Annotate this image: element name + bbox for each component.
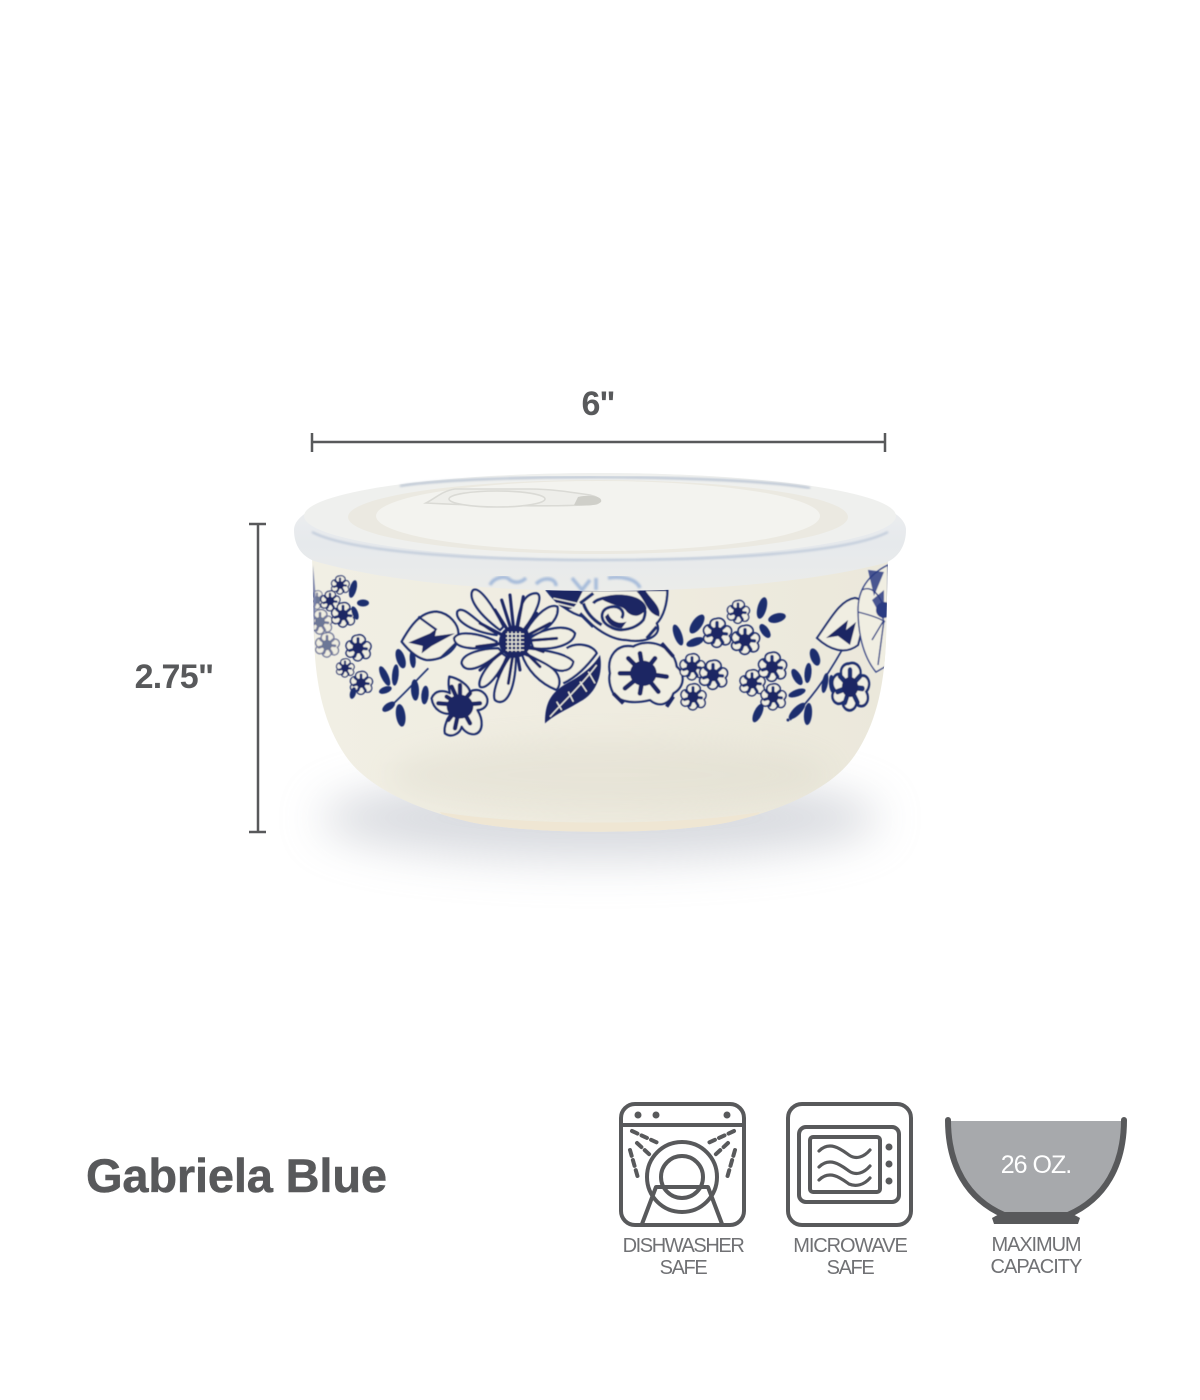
ghosted print through lid bbox=[490, 577, 640, 590]
lid front seal line bbox=[312, 532, 888, 560]
microwave label: MICROWAVE bbox=[793, 1235, 907, 1257]
large leaf under daisy bbox=[545, 645, 601, 723]
central flower bbox=[609, 643, 683, 707]
capacity label: CAPACITY bbox=[991, 1256, 1082, 1278]
vent tab bbox=[426, 489, 601, 507]
icon: microwave safe bbox=[788, 1104, 911, 1279]
large daisy bbox=[454, 590, 575, 702]
traced central bouquet bbox=[377, 590, 683, 735]
capacity label: MAXIMUM bbox=[992, 1234, 1081, 1256]
far right spray and flower bbox=[786, 565, 892, 725]
right flower cluster bbox=[670, 596, 787, 724]
bowl shadow bbox=[320, 776, 880, 860]
leaf spray bbox=[377, 648, 429, 727]
icon: maximum capacity bowl bbox=[948, 1120, 1124, 1278]
height dimension label: 2.75" bbox=[135, 658, 213, 696]
dishwasher label: SAFE bbox=[660, 1257, 707, 1279]
rose bbox=[547, 590, 667, 641]
width dimension line bbox=[312, 433, 885, 452]
icon: dishwasher safe bbox=[621, 1104, 744, 1279]
lid inner well bbox=[348, 480, 848, 554]
lower body shading bbox=[430, 760, 760, 832]
lid rim bbox=[294, 473, 906, 591]
lower left flower bbox=[432, 677, 487, 735]
product photo: lidded bowl bbox=[294, 473, 906, 860]
width dimension label: 6" bbox=[581, 385, 615, 423]
lid back seal line bbox=[400, 477, 810, 488]
product name: Gabriela Blue bbox=[86, 1149, 387, 1202]
left flower cluster bbox=[309, 565, 372, 700]
ceramic bowl body bbox=[312, 555, 888, 832]
lid top ring bbox=[304, 473, 896, 559]
dishwasher label: DISHWASHER bbox=[623, 1235, 744, 1257]
outlined leaf left of daisy bbox=[402, 612, 458, 660]
floral band bbox=[309, 565, 892, 735]
microwave label: SAFE bbox=[827, 1257, 874, 1279]
height dimension line bbox=[249, 524, 266, 832]
capacity value: 26 OZ. bbox=[1001, 1151, 1071, 1179]
clear plastic lid bbox=[294, 473, 906, 591]
lid centre dome bbox=[376, 481, 820, 551]
